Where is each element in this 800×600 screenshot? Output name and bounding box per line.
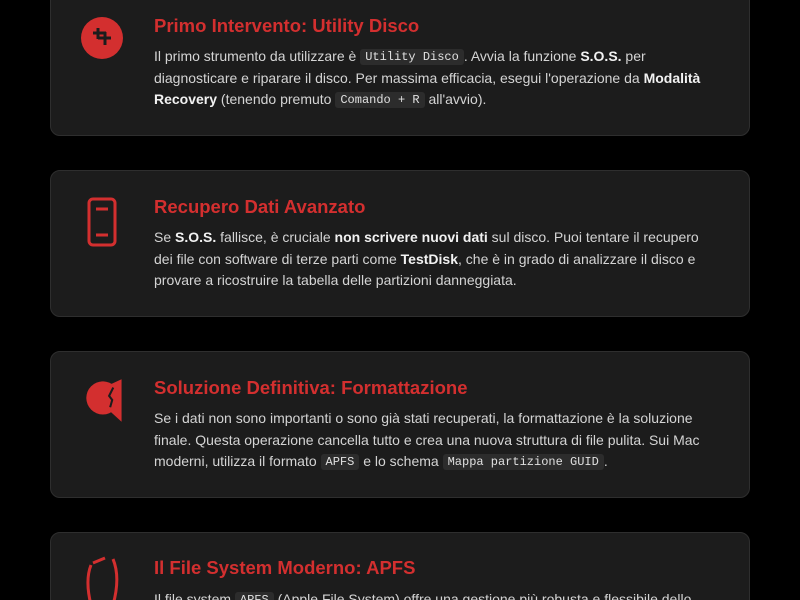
card: apfs	[50, 532, 750, 600]
title: Recupero Dati Avanzato	[154, 196, 365, 217]
title: Soluzione Definitiva: Formattazione	[154, 377, 468, 398]
text: APFS	[326, 455, 354, 469]
icon: format	[86, 379, 122, 422]
text: Comando + R	[340, 93, 420, 107]
card: formattazione	[50, 351, 750, 498]
card: utility disco	[50, 0, 750, 136]
text: Mappa partizione GUID	[448, 455, 599, 469]
text: Utility Disco	[365, 50, 459, 64]
icon: shield	[86, 556, 118, 600]
title: Primo Intervento: Utility Disco	[154, 15, 419, 36]
icon: phone	[88, 198, 116, 246]
text: Se i dati non sono importanti o sono già stati recuperati, la formattazione è la soluzione finale. Questa operazione cancella tutto e crea una nuova struttura di file pulita. Sui Mac moderni, utilizza il formato e lo schema .	[154, 410, 700, 469]
card: recupero dati	[50, 170, 750, 317]
text: Il primo strumento da utilizzare è . Avvia la funzione S.O.S. per diagnosticare e riparare il disco. Per massima efficacia, esegui l'operazione da Modalità Recovery (tenendo premuto all'avvio).	[154, 48, 700, 107]
title: Il File System Moderno: APFS	[154, 557, 415, 578]
icon: first aid	[81, 17, 123, 59]
text: Se S.O.S. fallisce, è cruciale non scrivere nuovi dati sul disco. Puoi tentare il recupero dei file con software di terze parti come TestDisk, che è in grado di analizzare il disco e provare a ricostruire la tabella delle partizioni danneggiata.	[154, 229, 699, 288]
